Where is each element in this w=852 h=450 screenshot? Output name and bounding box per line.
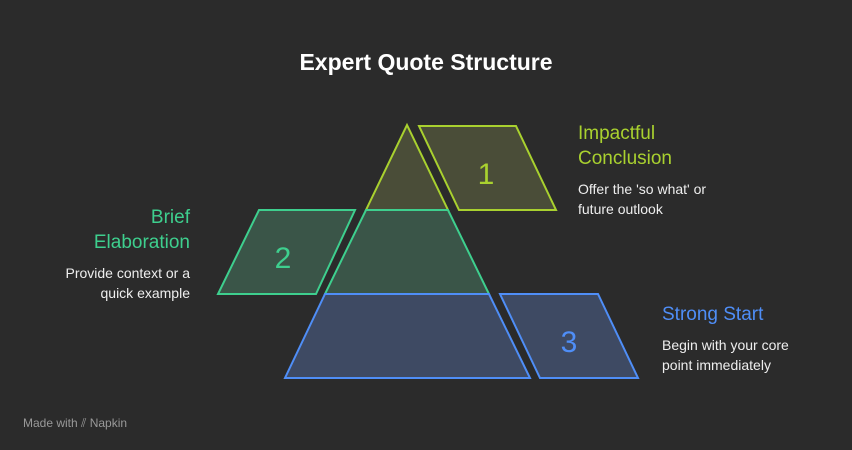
badge 2 — [218, 210, 355, 294]
pyramid level 1 — [366, 125, 448, 210]
text: impactful conclusion: Offer the 'so what' or — [578, 181, 706, 197]
badge 3: 3 — [561, 326, 577, 359]
pyramid level 3 — [285, 294, 530, 378]
text: strong start — [662, 304, 789, 373]
text: brief elaboration: Elaboration — [94, 232, 190, 253]
text: impactful conclusion: Conclusion — [578, 148, 672, 169]
text: strong start: point immediately — [662, 357, 771, 373]
text: strong start: Strong Start — [662, 304, 763, 325]
text: impactful conclusion: Impactful — [578, 123, 655, 144]
text: strong start: Begin with your core — [662, 337, 789, 353]
pyramid level 2 — [325, 210, 489, 294]
text: brief elaboration: Provide context or a — [65, 265, 190, 281]
text: brief elaboration — [65, 207, 190, 301]
badge 1: 1 — [478, 158, 494, 191]
text: brief elaboration: Brief — [151, 207, 190, 228]
text: brief elaboration: quick example — [100, 285, 190, 301]
badge 2: 2 — [275, 242, 291, 275]
footer: Made with ⫽ Napkin — [23, 416, 127, 430]
title: Expert Quote Structure — [299, 49, 553, 75]
badge 1 — [419, 126, 556, 210]
text: impactful conclusion: future outlook — [578, 201, 663, 217]
text: impactful conclusion — [578, 123, 706, 217]
badge 3 — [500, 294, 638, 378]
